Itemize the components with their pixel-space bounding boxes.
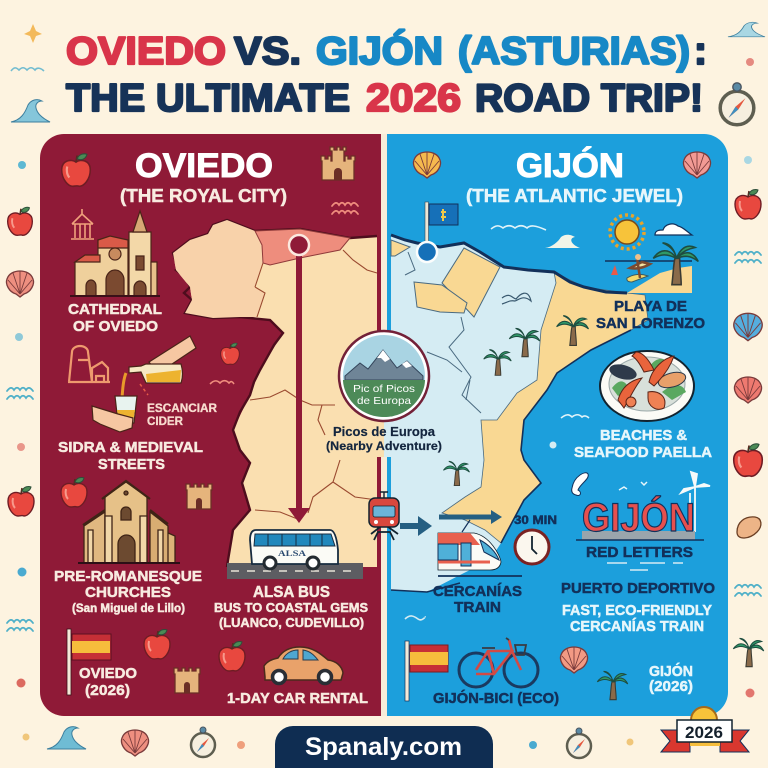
icon: compass (720, 83, 754, 125)
icon: apple (144, 629, 170, 659)
icon: dot (17, 443, 25, 451)
decoration: ripples (607, 563, 683, 570)
heading: Oviedo (120, 147, 287, 206)
illustration: cathedral (70, 211, 160, 296)
label: Gijón 2026: GIJÓN (649, 662, 693, 680)
title (66, 29, 707, 120)
icon: oyster (737, 517, 761, 538)
heading: Gijón (466, 147, 683, 206)
label: ALSA bus (214, 584, 368, 630)
icon: compass (191, 727, 215, 757)
illustration: pre-romanesque church (78, 481, 180, 563)
illustration: car (264, 647, 343, 684)
title: GIJÓN (316, 29, 443, 73)
icon: dot (744, 156, 752, 164)
label: Gijón 2026 (649, 662, 693, 695)
label: cercanías: TRAIN (454, 599, 501, 616)
decoration: ripple (405, 616, 425, 620)
icon: blue shell (734, 313, 762, 341)
footer: website pill: Spanaly.com (305, 733, 462, 761)
icon: palm (557, 316, 588, 345)
map: Spain east (391, 235, 648, 592)
badge: 2026 (661, 707, 749, 752)
heading: Oviedo: (THE ROYAL CITY) (120, 186, 287, 206)
illustration: road (227, 563, 363, 579)
label: cathedral: CATHEDRAL (68, 301, 162, 318)
icon: dot (22, 734, 30, 740)
decoration: sea waves (491, 226, 589, 418)
icon: asturias flag (417, 202, 458, 262)
heading: Oviedo: OVIEDO (135, 147, 273, 185)
label: ALSA bus: BUS TO COASTAL GEMS (214, 600, 368, 615)
strip: central divider (381, 134, 387, 716)
icon: palm (509, 328, 540, 357)
label: Gijón 2026: (2026) (649, 678, 693, 695)
icon: small apple (221, 343, 239, 364)
icon: palm (484, 350, 511, 375)
label: Oviedo 2026 (79, 665, 137, 699)
icon: star (24, 24, 42, 43)
icon: dot (746, 58, 754, 66)
label: escanciar cider: ESCANCIAR (147, 401, 217, 415)
icon: apple (62, 154, 90, 186)
icon: shell (6, 271, 34, 297)
icon: yellow shell (413, 152, 441, 178)
icon: dot (626, 738, 634, 746)
icon: birds (619, 482, 647, 490)
icon: waves (7, 388, 33, 399)
icon: apple (734, 444, 762, 476)
title: THE ULTIMATE (66, 77, 350, 120)
label: pre-romanesque churches (54, 568, 202, 615)
illustration: cider pour (92, 336, 196, 432)
arrow: train to Gijón (400, 516, 432, 536)
icon: compass (567, 728, 591, 758)
icon: palm (443, 461, 470, 486)
label: cercanías: CERCANÍAS (433, 583, 522, 600)
label: eco train: FAST, ECO-FRIENDLY (562, 602, 712, 619)
icon: palm (597, 671, 628, 700)
border icons: left (6, 161, 34, 688)
label: playa: PLAYA DE (614, 298, 687, 315)
label: cercanías (433, 583, 522, 616)
title: VS. (234, 30, 301, 73)
sign: Gijón red letters: GIJÓN (582, 494, 695, 540)
illustration: ALSA bus (250, 530, 338, 569)
border icons: top (11, 22, 765, 125)
title: (ASTURIAS) (458, 30, 690, 73)
icon: Asturias marker (289, 235, 309, 255)
label: cathedral: OF OVIEDO (73, 318, 158, 335)
badge: Picos de Europa: de Europa (357, 395, 411, 407)
icon: dot (15, 333, 23, 341)
icon: pink waves (210, 381, 234, 384)
illustration: seafood plate (600, 351, 694, 421)
label: escanciar cider: CIDER (147, 414, 183, 428)
arrow: train route (439, 510, 502, 524)
icon: bird (502, 293, 531, 304)
label: Oviedo 2026: OVIEDO (79, 665, 137, 682)
label: eco train: CERCANÍAS TRAIN (570, 618, 704, 635)
icon: Spanish flag (67, 629, 111, 695)
icon: pink shell (560, 647, 588, 673)
icon: outline temple (71, 209, 94, 239)
label: Picos de Europa (326, 424, 442, 453)
icon: shell (121, 730, 149, 756)
label: escanciar cider (147, 401, 217, 428)
icon: train (369, 492, 399, 540)
label: 30 min: 30 MIN (514, 513, 557, 527)
illustration: beach scene (605, 215, 698, 293)
title: 2026 (366, 77, 461, 120)
label: Picos de Europa: Picos de Europa (333, 424, 436, 439)
icon: clock (515, 530, 549, 564)
label: beaches and paella (574, 427, 712, 461)
icon: dot (18, 161, 26, 169)
icon: outline old town (68, 346, 110, 382)
icon: waves (7, 620, 33, 631)
label: Picos de Europa: (Nearby Adventure) (326, 439, 442, 453)
label: sidra: SIDRA & MEDIEVAL (58, 439, 203, 456)
heading: Gijón: GIJÓN (516, 147, 624, 185)
icon: dot (550, 442, 556, 448)
label: beaches and paella: BEACHES & (600, 427, 687, 444)
icon: castle (321, 147, 355, 180)
label: playa (596, 298, 705, 332)
label: Oviedo 2026: (2026) (85, 682, 130, 699)
icon: apple (8, 207, 32, 235)
label: pre-romanesque churches: CHURCHES (85, 584, 171, 601)
panel: Oviedo (40, 134, 381, 716)
icon: big wave (11, 100, 50, 122)
illustration: cercanías train (438, 520, 522, 576)
border icons: right (733, 156, 764, 698)
icon: Spanish flag (405, 641, 448, 701)
icon: pale wave (728, 22, 765, 37)
label: beaches and paella: SEAFOOD PAELLA (574, 444, 712, 461)
icon: road and bus arrow (288, 250, 310, 523)
icon: dot (237, 741, 245, 749)
panel: Gijón (387, 134, 728, 716)
map: Spain west (173, 220, 377, 567)
title: OVIEDO (66, 30, 226, 73)
label: puerto deportivo: PUERTO DEPORTIVO (561, 580, 715, 597)
label: eco train (562, 602, 712, 635)
icon: dot (16, 678, 26, 688)
icon: sun (610, 215, 644, 249)
label: cathedral (68, 301, 162, 335)
icon: sea foam (572, 473, 588, 495)
icon: apple (61, 477, 87, 507)
label: car rental: 1-DAY CAR RENTAL (227, 690, 368, 707)
icon: tower (186, 484, 212, 509)
icon: dot (529, 741, 537, 749)
illustration: ALSA bus: ALSA (278, 548, 307, 558)
icon: waves (735, 585, 761, 596)
label: playa: SAN LORENZO (596, 315, 705, 332)
border icons: bottom (22, 727, 634, 758)
label: sidra: STREETS (98, 456, 165, 473)
icon: apple (8, 486, 34, 516)
label backing: map behind Picos caption (372, 418, 394, 457)
icon: pink shell (683, 152, 711, 178)
badge: Picos de Europa: Pic of Picos (353, 383, 415, 395)
icon: tower (174, 668, 200, 693)
icon: wind turbine (681, 472, 710, 532)
icon: apple (735, 189, 761, 219)
icon: palm (733, 638, 764, 667)
footer: website pill (275, 726, 493, 768)
icon: red shell (734, 377, 762, 403)
icon: apple (219, 641, 245, 671)
title: : (694, 30, 707, 73)
heading: Gijón: (THE ATLANTIC JEWEL) (466, 186, 683, 206)
icon: cloud (655, 224, 692, 235)
label: red letters: RED LETTERS (586, 544, 693, 561)
label: pre-romanesque churches: (San Miguel de Lillo) (72, 601, 185, 615)
icon: waves (735, 252, 761, 263)
icon: beach palm (653, 243, 698, 285)
label: ALSA bus: (LUANCO, CUDEVILLO) (219, 615, 364, 630)
icon: wave (47, 727, 86, 749)
icon: waves (11, 68, 44, 71)
badge: 2026: 2026 (685, 723, 723, 742)
label: sidra (58, 439, 203, 473)
label: ALSA bus: ALSA BUS (253, 584, 330, 601)
icon: pink waves (332, 203, 358, 214)
badge: Picos de Europa (339, 331, 429, 421)
label: gijón-bici: GIJÓN-BICI (ECO) (433, 689, 559, 707)
title: ROAD TRIP! (475, 77, 703, 120)
icon: dot (18, 568, 26, 576)
icon: dot (746, 688, 754, 698)
icon: bicycle (459, 638, 538, 687)
label: pre-romanesque churches: PRE-ROMANESQUE (54, 568, 202, 585)
